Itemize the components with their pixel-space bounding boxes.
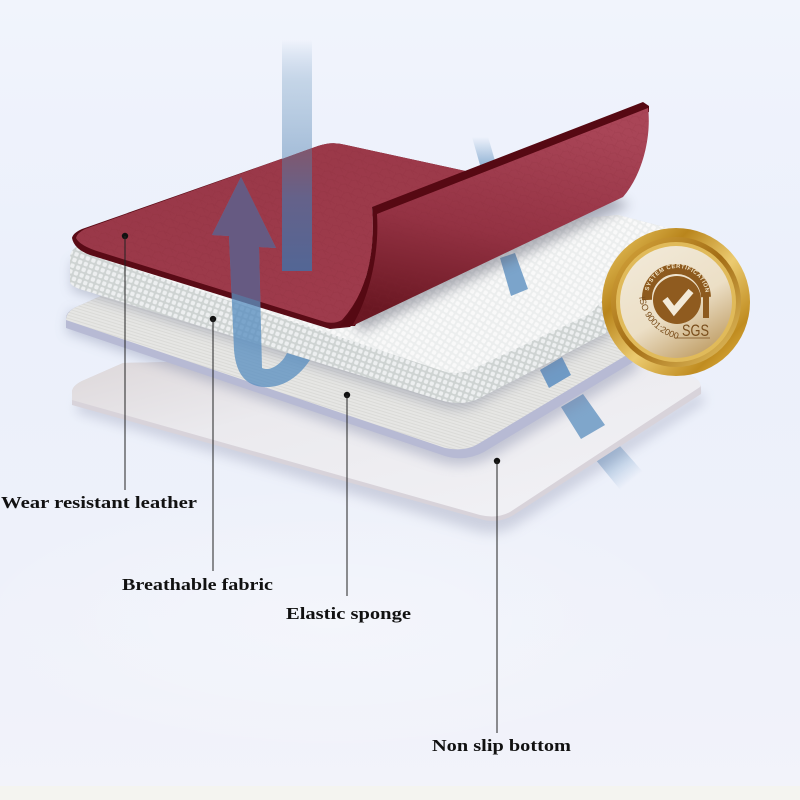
arrow: upward airflow bbox=[212, 177, 310, 387]
leather flap back face bbox=[352, 108, 649, 326]
callout: breathable fabric bbox=[122, 316, 274, 594]
callout: elastic sponge: Elastic sponge bbox=[286, 604, 412, 623]
callout: non slip bottom bbox=[432, 458, 571, 755]
airflow strip: exit segment bbox=[595, 445, 652, 492]
layer: wear resistant leather bbox=[72, 102, 649, 332]
leather top face bbox=[76, 143, 470, 323]
callout: non slip bottom: Non slip bottom bbox=[432, 736, 571, 755]
layer: elastic sponge bbox=[66, 295, 640, 465]
callout: wear resistant leather: Wear resistant leather bbox=[1, 493, 198, 512]
callout: wear resistant leather bbox=[1, 233, 198, 512]
arrow: downward airflow bbox=[282, 40, 312, 271]
badge emblem arc bbox=[647, 269, 706, 300]
badge check mark bbox=[653, 276, 701, 324]
callout: breathable fabric: Breathable fabric bbox=[122, 575, 274, 594]
icon: gold certification badge: ISO 9001:2000 bbox=[639, 297, 678, 339]
layer: breathable fabric bbox=[70, 215, 668, 409]
layer: non slip bottom bbox=[72, 352, 705, 533]
icon: gold certification badge: SGS bbox=[682, 321, 709, 340]
icon: gold certification badge bbox=[602, 228, 750, 376]
icon: gold certification badge: SYSTEM CERTIFICATION bbox=[645, 264, 710, 292]
leather flap edge bbox=[340, 102, 649, 326]
leather outer dark edge bbox=[72, 143, 470, 329]
airflow strip: lower segment bbox=[561, 394, 605, 439]
callout: elastic sponge bbox=[286, 392, 412, 623]
